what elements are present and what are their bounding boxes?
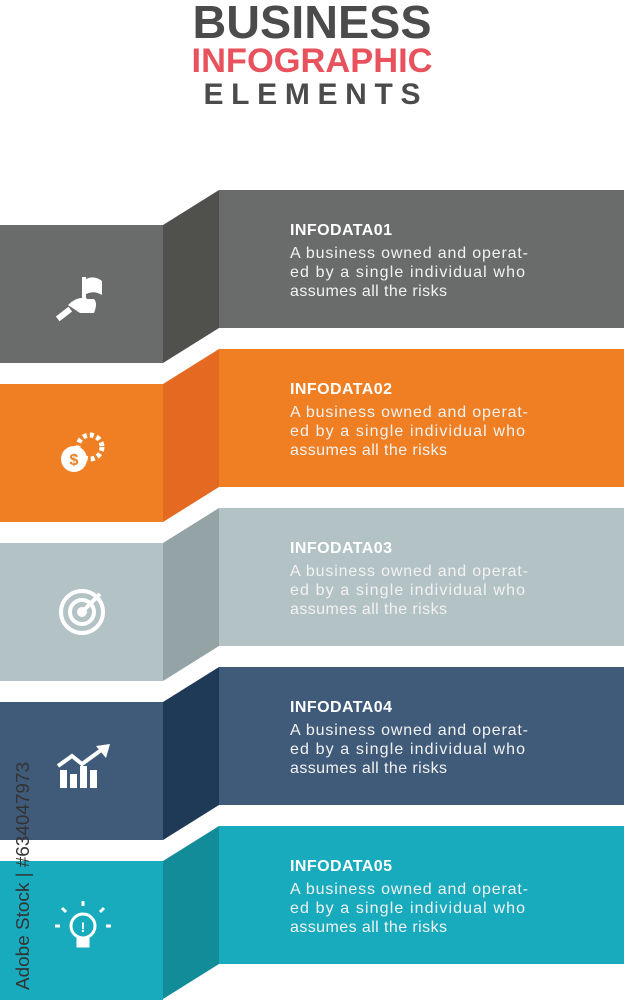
text: infodata03: ed by a single individual who <box>290 582 525 599</box>
text: infodata04: ed by a single individual who <box>290 741 525 758</box>
title <box>192 0 432 111</box>
text: infodata02: ed by a single individual who <box>290 423 525 440</box>
text: infodata02: assumes all the risks <box>290 442 447 459</box>
icon: growth chart <box>58 744 110 788</box>
text: infodata01: ed by a single individual who <box>290 264 525 281</box>
text: infodata05: A business owned and operat- <box>290 881 528 898</box>
title: INFOGRAPHIC <box>192 42 432 80</box>
text: infodata04: A business owned and operat- <box>290 722 528 739</box>
text: infodata05: INFODATA05 <box>290 858 392 875</box>
icon: lightbulb <box>55 901 111 946</box>
text: infodata05: ed by a single individual who <box>290 900 525 917</box>
text: infodata03: INFODATA03 <box>290 540 392 557</box>
text: infodata02: A business owned and operat- <box>290 404 528 421</box>
icon: lightbulb: ! <box>81 919 85 935</box>
text: infodata01: INFODATA01 <box>290 222 392 239</box>
text: infodata03: A business owned and operat- <box>290 563 528 580</box>
title: ELEMENTS <box>204 78 420 111</box>
watermark id: Adobe Stock | #634047973 <box>13 762 33 990</box>
text: infodata05 <box>290 858 528 936</box>
row 1 <box>0 190 624 363</box>
text: infodata01: A business owned and operat- <box>290 245 528 262</box>
row 4 <box>0 667 624 840</box>
row 3 <box>0 508 624 681</box>
text: infodata04 <box>290 699 528 777</box>
text: infodata04: INFODATA04 <box>290 699 392 716</box>
text: infodata05: assumes all the risks <box>290 919 447 936</box>
text: infodata02 <box>290 381 528 459</box>
text: infodata04: assumes all the risks <box>290 760 447 777</box>
text: infodata01 <box>290 222 528 300</box>
text: infodata03 <box>290 540 528 618</box>
icon: dollar gear: $ <box>70 452 79 469</box>
icon: dollar gear <box>61 435 102 472</box>
row 5 <box>0 826 624 1000</box>
icon: target <box>61 591 103 633</box>
text: infodata02: INFODATA02 <box>290 381 392 398</box>
row 2 <box>0 349 624 522</box>
text: infodata03: assumes all the risks <box>290 601 447 618</box>
text: infodata01: assumes all the risks <box>290 283 447 300</box>
icon: hand with flag <box>56 277 102 321</box>
